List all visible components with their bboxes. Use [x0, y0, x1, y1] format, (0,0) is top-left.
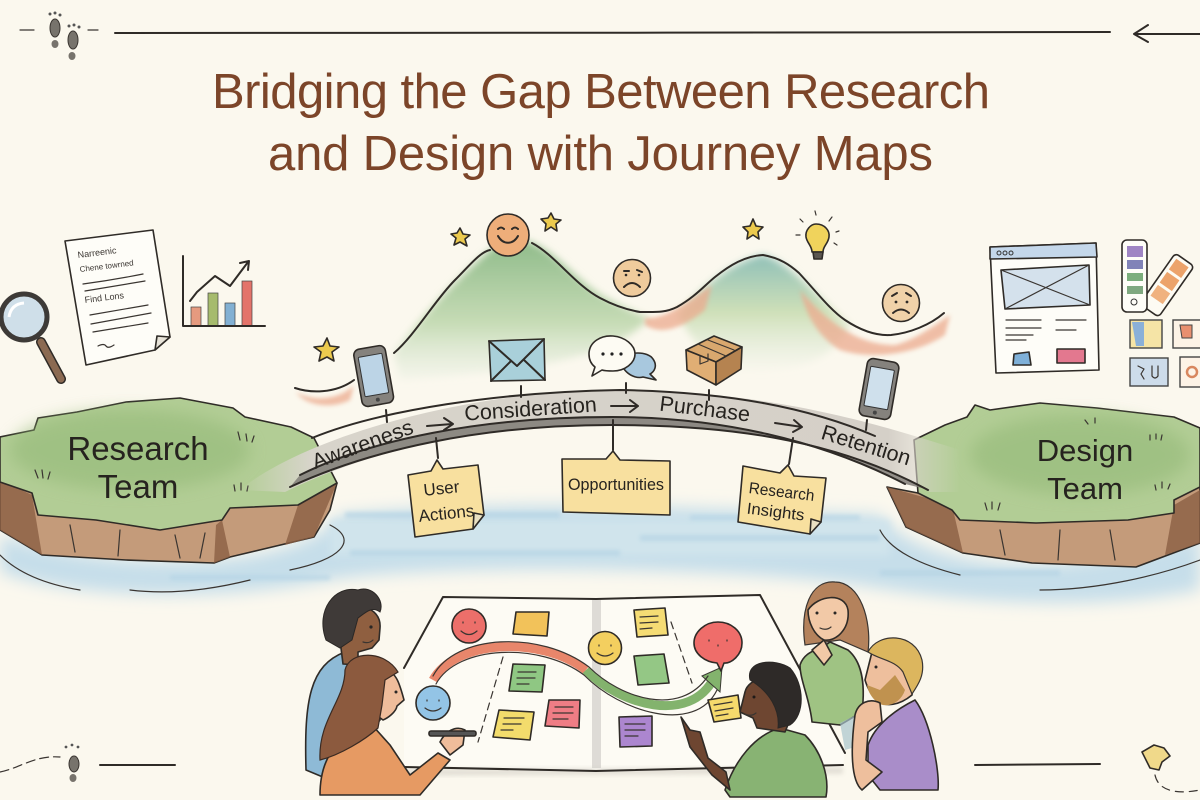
- left island: Research Team: [0, 398, 337, 563]
- icon: envelope: [489, 339, 545, 381]
- research document: Find Lons: [84, 290, 125, 305]
- watercolor washes: [394, 240, 650, 380]
- label: Team: [98, 468, 178, 505]
- person: bearded man in purple: [852, 638, 938, 790]
- table surface: [404, 595, 845, 770]
- stage arrow 3: [775, 420, 802, 432]
- design component tiles: [1130, 320, 1200, 387]
- top decoration: footprints and line: [20, 12, 1200, 60]
- star on second hill: [743, 219, 763, 239]
- stage arrow 2: [611, 400, 638, 412]
- curve line: [295, 243, 944, 391]
- bridge deck: [240, 390, 960, 492]
- workshop table with journey map: [404, 595, 845, 776]
- design wireframe window: [990, 243, 1099, 373]
- note: User Actions: User: [423, 477, 461, 500]
- research chart: [183, 256, 265, 326]
- person: woman with pen in orange: [320, 655, 476, 795]
- label: Research: [67, 430, 209, 467]
- title: [212, 65, 990, 181]
- journey curve: [295, 240, 950, 405]
- happy face and stars on peak: [451, 213, 561, 256]
- research document: Narreenic: [77, 245, 117, 260]
- research document: [65, 230, 170, 365]
- note: Research Insights: [738, 465, 826, 534]
- icon: phone left: [353, 345, 394, 407]
- note: User Actions: [408, 460, 484, 537]
- label: Design: [1037, 433, 1133, 468]
- note: Opportunities: Opportunities: [568, 476, 664, 494]
- star near left phone: [314, 338, 339, 361]
- icon: light bulb: [796, 211, 839, 259]
- label: [67, 430, 209, 505]
- stage: Retention: Retention: [819, 420, 914, 470]
- icon: magnifier: [1, 294, 61, 379]
- water ripples: [0, 525, 1200, 592]
- island soil: [0, 478, 337, 563]
- title: Bridging the Gap Between Research: [212, 65, 990, 119]
- note: User Actions: Actions: [418, 501, 475, 526]
- bridge: journey stages: [240, 383, 960, 492]
- label: Team: [1047, 471, 1123, 506]
- stickers and faces: [452, 609, 486, 643]
- person: woman in green sweater: [800, 582, 869, 750]
- journey arrow: [433, 647, 586, 680]
- sad face 2: [882, 284, 920, 322]
- note: Opportunities: [562, 451, 670, 515]
- color swatches: [1122, 240, 1194, 317]
- sad face 1: [614, 260, 650, 296]
- island soil: [887, 487, 1200, 567]
- label: [1037, 433, 1133, 506]
- icon: package box: [686, 336, 742, 385]
- island grass: [914, 403, 1200, 523]
- note: Research Insights: Research: [748, 480, 815, 505]
- water: [0, 506, 1200, 603]
- title: and Design with Journey Maps: [268, 127, 933, 181]
- icon: chat bubbles: [589, 336, 656, 380]
- person: man in blue shirt: [306, 589, 381, 780]
- stage arrow 1: [427, 418, 453, 430]
- right island: Design Team: [887, 403, 1200, 567]
- stage: Purchase: Purchase: [658, 392, 751, 426]
- stage: Awareness: Awareness: [309, 415, 416, 474]
- bottom left decoration: [0, 744, 175, 782]
- island grass: [0, 398, 337, 530]
- note: Research Insights: Insights: [746, 501, 805, 525]
- person: man in green shirt pointing: [681, 662, 827, 797]
- stage: Consideration: Consideration: [464, 392, 598, 426]
- bottom right decoration: [975, 745, 1200, 792]
- icon: phone right: [858, 358, 900, 420]
- research document: Chene towrned: [79, 258, 134, 274]
